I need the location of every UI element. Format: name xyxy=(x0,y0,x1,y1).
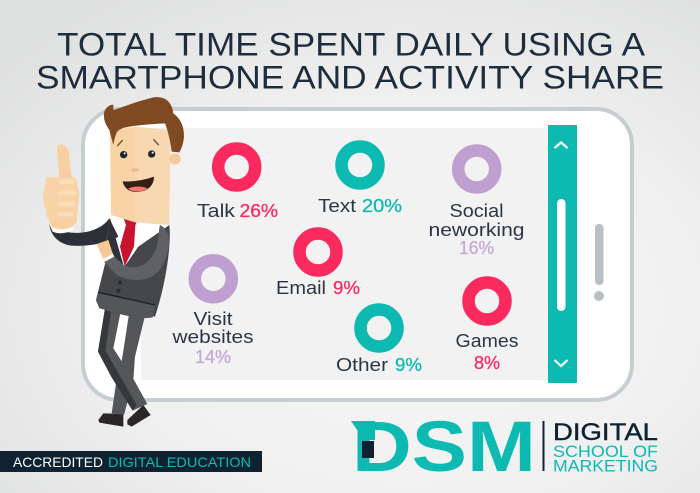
item: email: Email xyxy=(276,277,326,298)
white gap between legs xyxy=(113,311,130,362)
item: visit websites: 14% xyxy=(195,346,231,367)
badge: accredited digital education xyxy=(0,451,262,472)
shoes xyxy=(98,413,123,427)
item: text xyxy=(318,146,402,216)
badge: accredited digital education: DIGITAL EDUCATION xyxy=(108,454,251,470)
right leg xyxy=(112,312,146,415)
mouth xyxy=(123,177,154,192)
item: games xyxy=(456,282,518,373)
left leg xyxy=(98,308,147,411)
right arm raised xyxy=(49,218,118,246)
phone side button xyxy=(594,224,604,301)
tie xyxy=(120,216,138,267)
item: talk: Talk xyxy=(197,200,236,221)
thumbs up hand xyxy=(43,144,79,229)
item: social networking: Social xyxy=(450,200,504,221)
nose xyxy=(131,168,139,172)
logo: DSM Digital School of Marketing: MARKETING xyxy=(553,456,658,476)
item: social networking xyxy=(428,150,524,258)
logo: DSM Digital School of Marketing: DSM xyxy=(352,408,536,487)
item: other: Other xyxy=(336,354,388,375)
logo: DSM Digital School of Marketing xyxy=(351,408,658,487)
item: other xyxy=(336,310,422,375)
item: visit websites: websites xyxy=(171,326,254,347)
item: social networking: neworking xyxy=(428,219,524,240)
scrollbar xyxy=(548,125,577,383)
item: talk xyxy=(197,148,278,221)
badge: accredited digital education: ACCREDITED xyxy=(13,454,103,470)
item: social networking: 16% xyxy=(459,237,494,258)
logo: DSM Digital School of Marketing: SCHOOL OF xyxy=(553,442,658,461)
jacket xyxy=(96,218,170,317)
item: games: 8% xyxy=(474,352,500,373)
item: talk: 26% xyxy=(240,200,278,221)
eyes xyxy=(120,151,127,158)
item: visit websites xyxy=(171,260,254,367)
item: text: 20% xyxy=(362,195,402,216)
item: text: Text xyxy=(318,195,356,216)
item: email: 9% xyxy=(333,277,360,298)
head xyxy=(104,97,184,225)
panel: smartphone xyxy=(83,109,632,400)
title xyxy=(36,26,664,96)
shirt xyxy=(111,215,169,268)
title: TOTAL TIME SPENT DAILY USING A xyxy=(57,26,646,62)
logo: DSM Digital School of Marketing: DIGITAL xyxy=(553,419,658,446)
item: email xyxy=(276,234,360,298)
item: other: 9% xyxy=(395,354,422,375)
item: visit websites: Visit xyxy=(194,308,232,329)
hair xyxy=(104,97,184,152)
character: businessman thumbs up xyxy=(43,97,184,427)
item: games: Games xyxy=(456,330,518,351)
left hand on waist xyxy=(97,240,113,259)
title: SMARTPHONE AND ACTIVITY SHARE xyxy=(36,60,664,96)
